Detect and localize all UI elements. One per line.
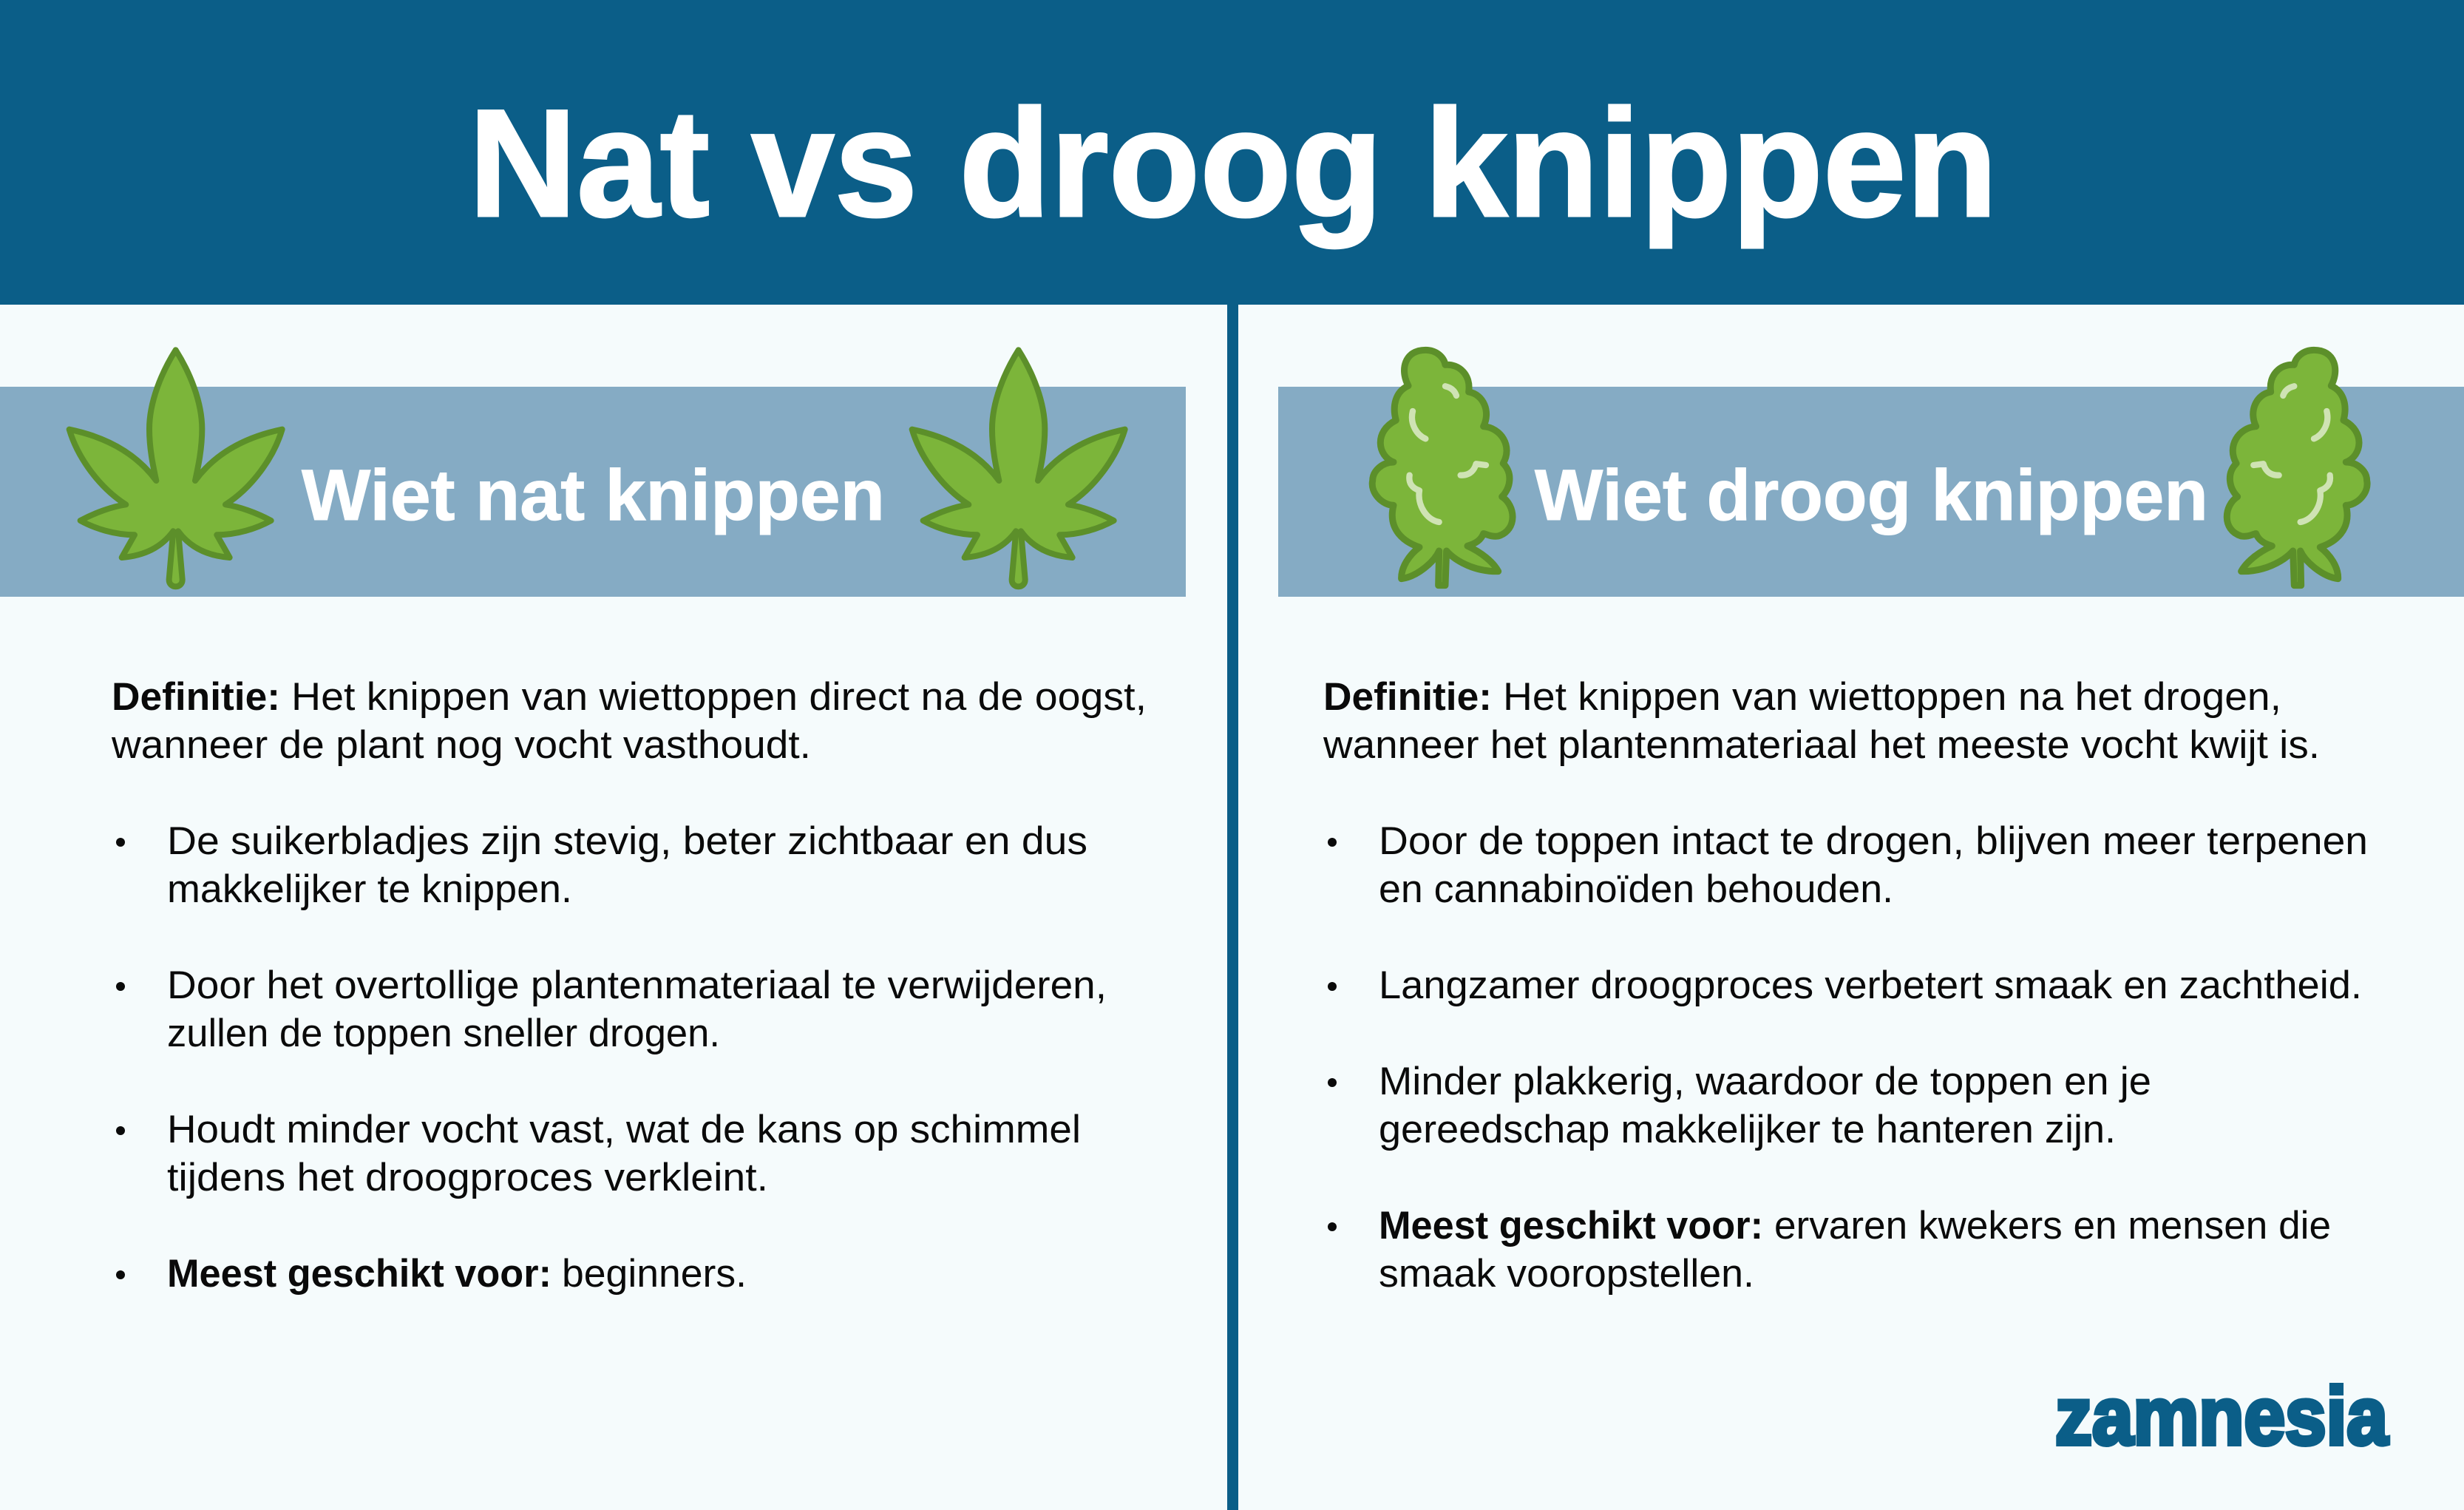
bullet: plantenmateriaal [116,964,1107,1055]
bullet: meest geschikt voor kwekers: Meest geschikt voor: [1379,1204,1763,1247]
panel: wiet nat knippen [0,350,1186,1296]
bullet: terpenen [1328,819,2368,911]
bullet: schimmel [116,1108,1081,1199]
header band [0,0,2464,305]
bullet: meest geschikt voor kwekers: smaak vooropstellen. [1379,1252,1754,1296]
bullet: droogproces: Langzamer droogproces verbetert smaak en zachtheid. [1379,964,2362,1007]
definition left: Definitie: [112,675,280,719]
bullet: plantenmateriaal: zullen de toppen sneller drogen. [167,1012,720,1055]
center divider [1227,305,1238,1510]
bullet: suikerbladjes: De suikerbladjes zijn stevig, beter zichtbaar en dus [167,819,1087,863]
bullet: schimmel: Houdt minder vocht vast, wat de kans op schimmel [167,1108,1081,1151]
definition right: Definitie: [1323,675,1492,719]
definition left [111,675,1147,767]
bullet: suikerbladjes [116,819,1087,911]
bullet: meest geschikt voor beginners: Meest geschikt voor: [167,1252,551,1296]
icon: bud left [1372,350,1513,586]
definition right [1323,675,2320,767]
panel: wiet droog knippen [1278,350,2464,1296]
icon: leaf left [69,350,282,586]
bullet: terpenen: Door de toppen intact te drogen, blijven meer terpenen [1379,819,2368,863]
heading band right [1278,387,2464,597]
title: Nat vs droog knippen [469,78,1998,248]
bullet: suikerbladjes: makkelijker te knippen. [167,867,572,911]
definition left: Het knippen van wiettoppen direct na de oogst, [291,675,1147,719]
bullet: plantenmateriaal: Door het overtollige plantenmateriaal te verwijderen, [167,964,1107,1007]
bullet: plakkerig: gereedschap makkelijker te hanteren zijn. [1379,1108,2116,1151]
bullet: meest geschikt voor beginners [116,1252,747,1296]
heading band left [0,387,1186,597]
bullet: meest geschikt voor beginners: beginners. [562,1252,747,1296]
heading right: Wiet droog knippen [1535,455,2208,535]
logo: zamnesia: zamnesia [2055,1371,2389,1462]
definition left: wanneer de plant nog vocht vasthoudt. [111,723,811,767]
bullet: terpenen: en cannabinoïden behouden. [1379,867,1893,911]
bullet: plakkerig [1328,1060,2151,1151]
bullet: schimmel: tijdens het droogproces verkleint. [167,1156,768,1199]
bullet: meest geschikt voor kwekers: ervaren kwekers en mensen die [1774,1204,2331,1247]
heading left: Wiet nat knippen [302,455,885,535]
bullet: meest geschikt voor kwekers [1328,1204,2331,1296]
icon: bud right [2227,350,2367,586]
icon: leaf right [912,350,1125,586]
definition right: Het knippen van wiettoppen na het drogen, [1503,675,2281,719]
bullet: plakkerig: Minder plakkerig, waardoor de toppen en je [1379,1060,2151,1103]
definition right: wanneer het plantenmateriaal het meeste vocht kwijt is. [1323,723,2320,767]
